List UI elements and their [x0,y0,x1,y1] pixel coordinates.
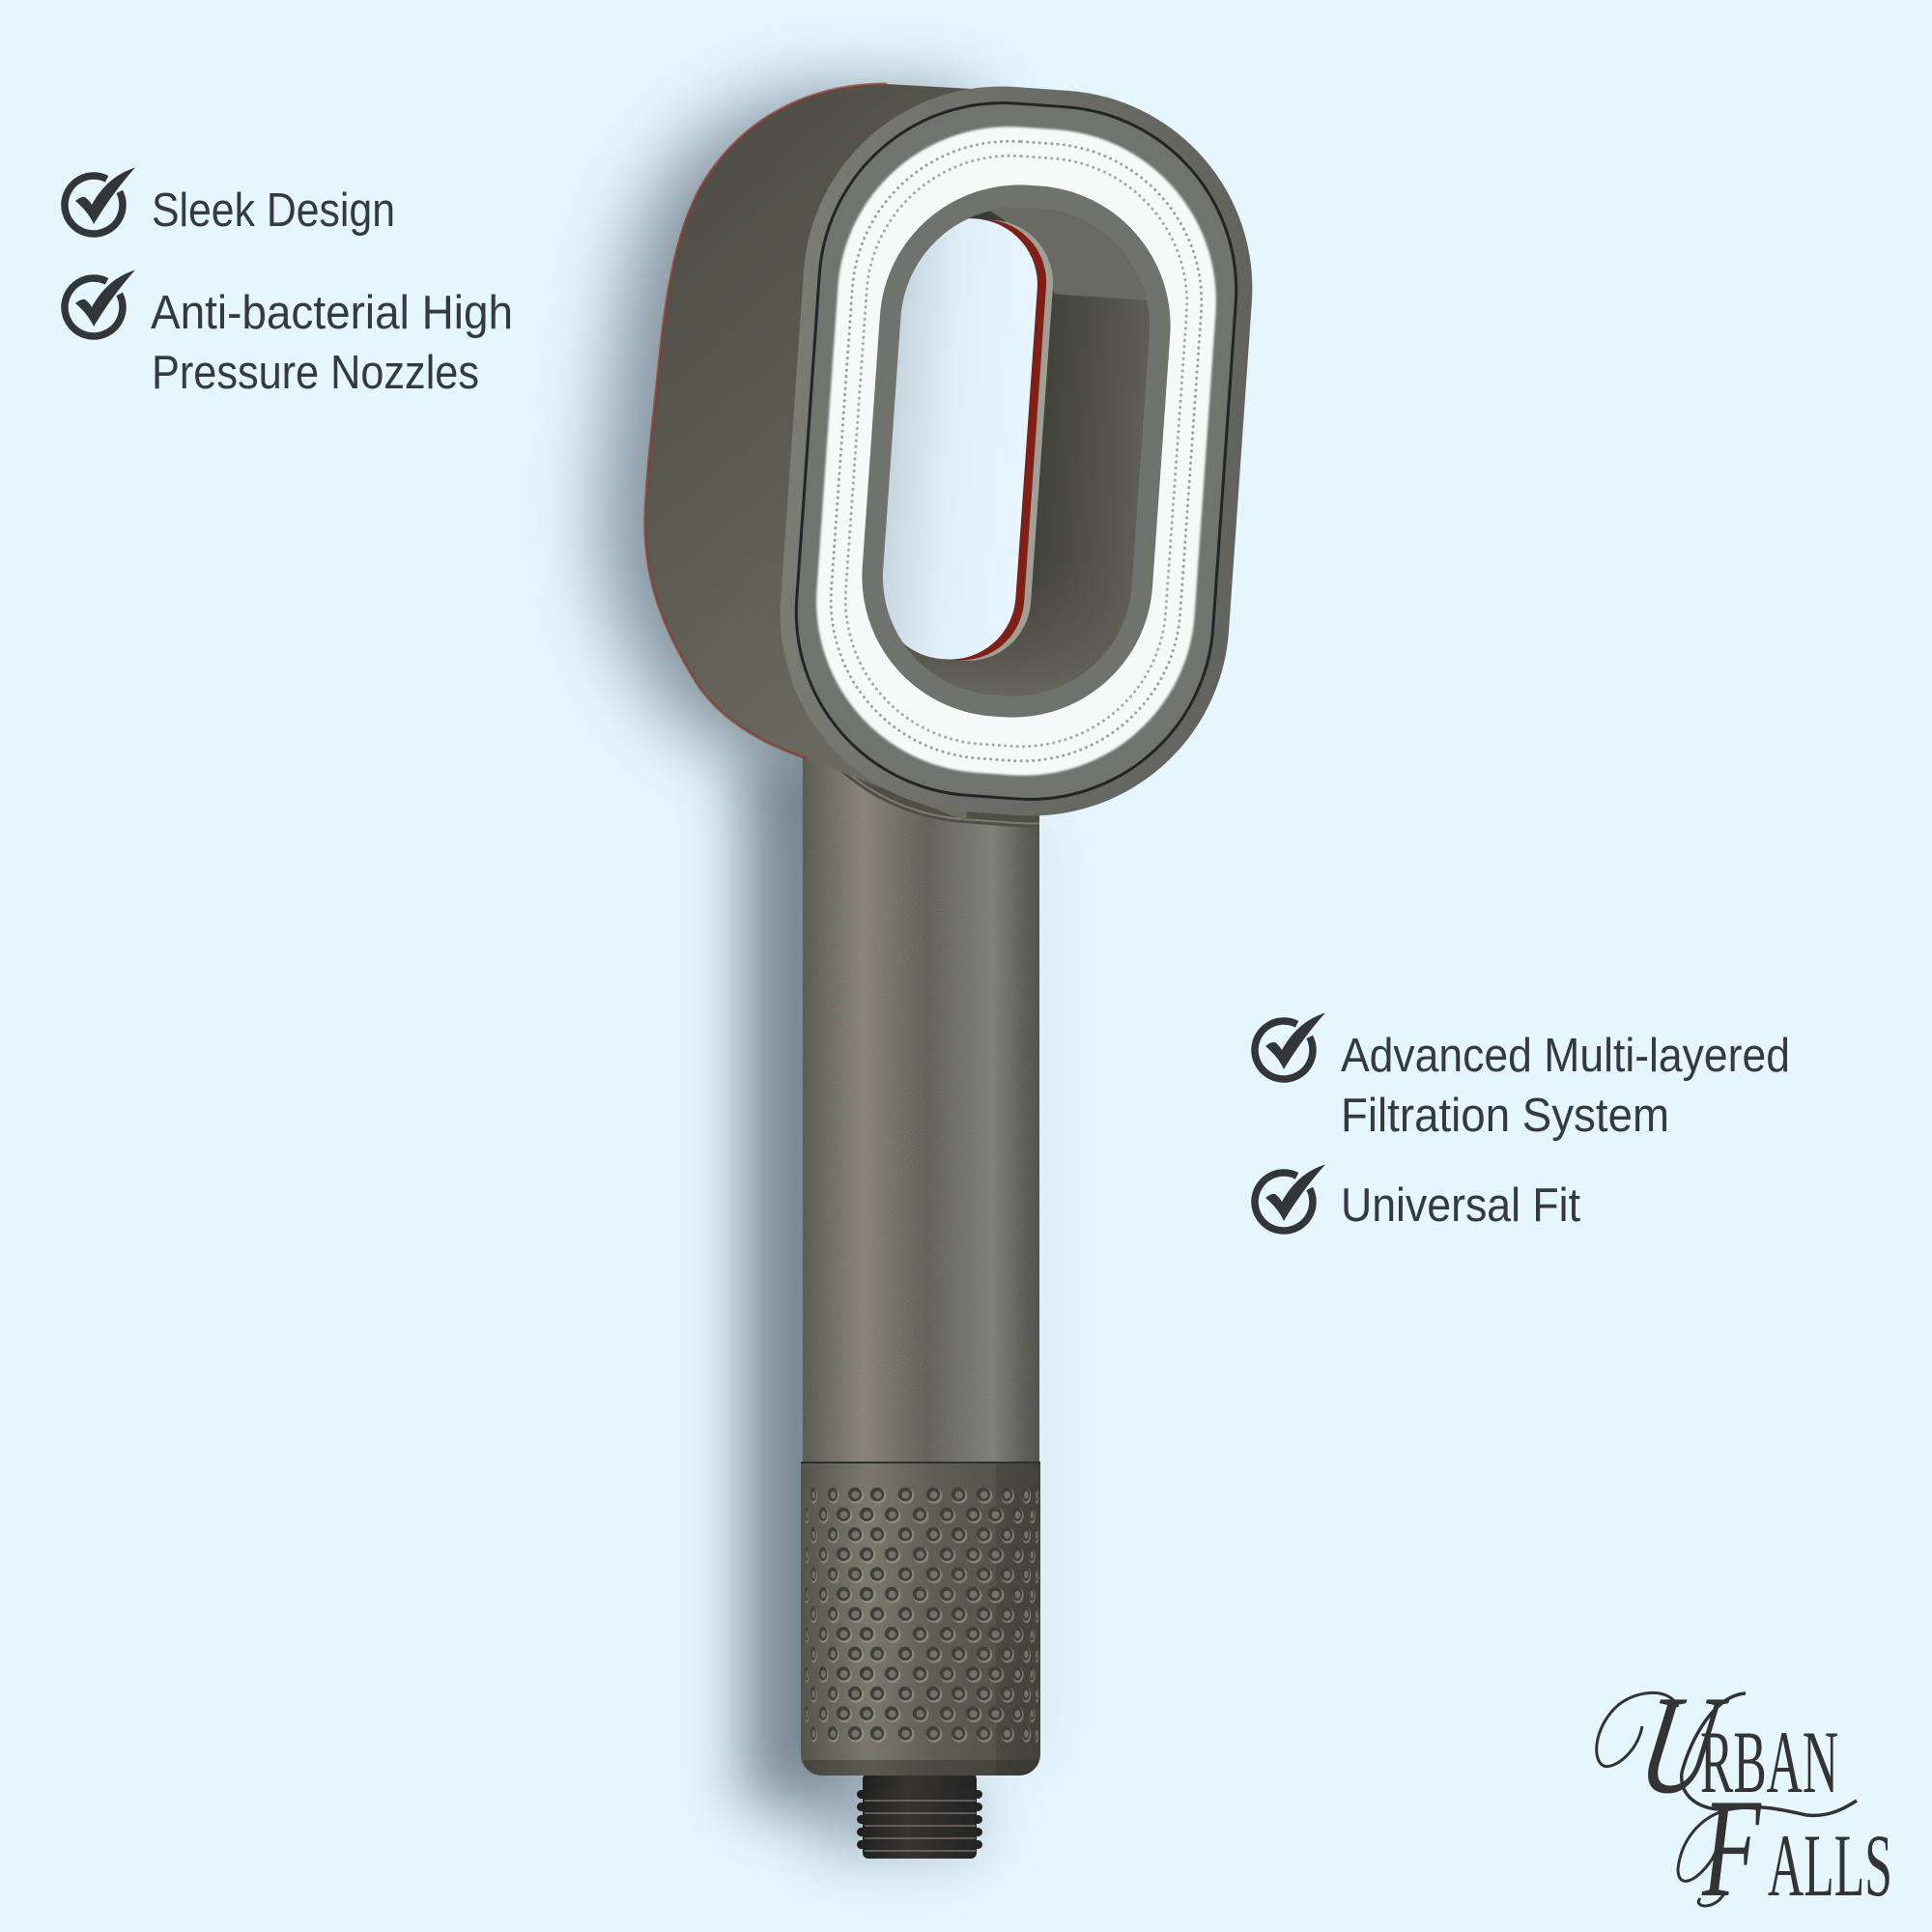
thread connector [857,1774,982,1859]
logo: Urban Falls: U [1629,1665,1736,1823]
knurled grip [801,1463,1040,1777]
feature: Sleek Design: Sleek Design [152,184,395,237]
inner gray ring [853,176,1179,726]
icon: check [65,168,135,234]
feature: Sleek Design [65,168,395,237]
outer rim [767,73,1265,829]
feature: Anti-bacterial High Pressure Nozzles: Anti-bacterial High [151,286,513,339]
head front plate [767,73,1265,829]
feature: Anti-bacterial High Pressure Nozzles: Pressure Nozzles [152,346,479,399]
icon: check [1255,1165,1325,1231]
shower head product [645,61,1277,1859]
feature: Advanced Multi-layered Filtration System: Filtration System [1341,1089,1669,1142]
inner band [783,91,1249,811]
head body [645,84,1024,821]
feature: Anti-bacterial High Pressure Nozzles [65,270,513,399]
logo: Urban Falls [1597,1665,1892,1927]
feature: Universal Fit [1255,1165,1580,1232]
central opening [874,199,1158,704]
handle [801,734,1040,1777]
feature: Universal Fit: Universal Fit [1341,1179,1580,1232]
white nozzle ring [805,115,1228,787]
icon: check [1255,1012,1325,1079]
product shadow [601,90,1047,1855]
feature: Advanced Multi-layered Filtration System: Advanced Multi-layered [1341,1029,1790,1082]
logo: Urban Falls: F [1701,1771,1762,1927]
nozzle dots inner [836,146,1197,756]
feature: Advanced Multi-layered Filtration System [1255,1012,1790,1142]
nozzle dots outer [820,130,1212,772]
icon: check [65,270,135,336]
collar ridge [840,771,1039,827]
